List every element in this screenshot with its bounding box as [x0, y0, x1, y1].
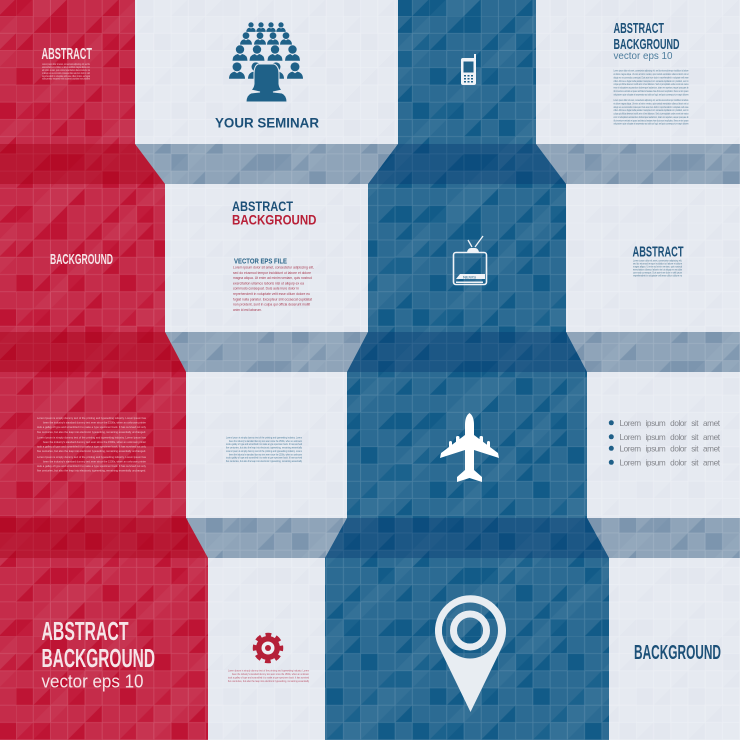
- tiny text block: sed do eiusmod tempor incididunt ut labore et dolore: [633, 262, 682, 266]
- tiny text block: took a galley of type and scrambled it to make a type specimen book. It has survived: [226, 456, 302, 460]
- body text: Lorem ipsum dolor sit amet, consectetur adipiscing elit,: [233, 266, 314, 270]
- tiny text block: voluptatem quia voluptas sit aspernatur aut odit aut fugit, sed quia consequuntur magni dolores: [614, 122, 689, 126]
- body text: non proident, sunt in culpa qui officia deserunt mollit: [233, 303, 310, 307]
- tiny text block on red: took a galley of type and scrambled it to make a type specimen book. It has survived not only: [37, 445, 147, 449]
- heading block: abstract background on red: BACKGROUND: [42, 643, 155, 673]
- heading: abstract: ABSTRACT: [232, 199, 294, 214]
- tiny text block: been the industry's standard dummy text ever since the 1500s, when an unknown: [229, 439, 302, 443]
- subheading: vector eps 10: vector eps 10: [614, 50, 673, 62]
- body text: exercitation ullamco laboris nisi ut aliquip ex ea: [233, 281, 305, 285]
- tiny text block on red: been the industry's standard dummy text ever since the 1500s, when an unknown printer: [43, 421, 146, 425]
- tiny text block on red: Lorem Ipsum is simply dummy text of the printing and typesetting industry. Lorem Ipsum has: [37, 455, 147, 459]
- panel: abstract right middle: [566, 184, 740, 332]
- tiny text block on red: been the industry's standard dummy text ever since the 1500s, when an unknown printer: [43, 459, 146, 463]
- tiny text block: culpa qui officia deserunt mollit anim id est laborum. Sed ut perspiciatis unde omnis iste natus: [614, 82, 689, 86]
- tiny text block: reprehenderit in voluptate velit esse cillum dolore eu: [633, 274, 682, 278]
- tiny text block: cillum dolore eu fugiat nulla pariatur. Excepteur sint occaecat cupidatat non proident, sunt in: [614, 108, 689, 112]
- heading block: abstract background on red: vector eps 10: [42, 670, 144, 692]
- tiny text block: been the industry's standard dummy text ever since the 1500s, when an unknown: [229, 452, 302, 456]
- tiny text block: error sit voluptatem accusantium doloremque laudantium, totam rem aperiam, eaque ipsa quae ab: [614, 115, 689, 119]
- panel: your seminar: [135, 0, 398, 144]
- icon: television: NEWS: [463, 274, 476, 279]
- heading: abstract: ABSTRACT: [632, 244, 684, 260]
- tiny text block: ad minim veniam, quis nostrud exercitation ullamco laboris nisi: [42, 68, 90, 72]
- tiny text block: et dolore magna aliqua. Ut enim ad minim veniam, quis nostrud exercitation ullamco laboris nisi ut: [614, 72, 689, 76]
- heading: your seminar: YOUR SEMINAR: [215, 114, 319, 130]
- heading: abstract background: ABSTRACT: [614, 20, 664, 37]
- heading: background: BACKGROUND: [232, 212, 317, 228]
- panel: center tiny text: [186, 372, 347, 518]
- tiny text block on red: Lorem Ipsum is simply dummy text of the printing and typesetting industry. Lorem Ipsum has: [37, 416, 147, 420]
- label: background on red: BACKGROUND: [50, 251, 113, 268]
- red column: [0, 0, 208, 740]
- bullet: item 2: Lorem ipsum dolor sit amet: [620, 433, 721, 442]
- body text: commodo consequat. Duis aute irure dolor in: [233, 287, 299, 291]
- blue column: [325, 0, 609, 740]
- tiny text block: [228, 668, 310, 683]
- tiny text block: five centuries, but also the leap into electronic typesetting, remaining essentially: [226, 459, 303, 463]
- tiny text block on red: five centuries, but also the leap into electronic typesetting, remaining essentially unchanged.: [37, 469, 146, 473]
- bullet: item 1: Lorem ipsum dolor sit amet: [620, 419, 721, 428]
- body text: [233, 266, 314, 312]
- panel: gear note: [208, 558, 325, 740]
- heading: abstract background: [614, 20, 680, 53]
- tiny text block on red: Lorem Ipsum is simply dummy text of the printing and typesetting industry. Lorem Ipsum has: [37, 435, 147, 439]
- heading block: abstract background on red: ABSTRACT: [42, 616, 129, 646]
- tiny text block: Lorem ipsum dolor sit amet, consectetur adipiscing elit, sed do eiusmod tempor incididunt ut labore: [614, 68, 689, 72]
- tiny text block on red: took a galley of type and scrambled it to make a type specimen book. It has survived not only: [37, 425, 147, 429]
- heading block: abstract background on red: [42, 616, 155, 692]
- body text: anim id est laborum.: [233, 308, 262, 312]
- body text: magna aliqua. Ut enim ad minim veniam, quis nostrud: [233, 276, 312, 280]
- tiny text block on red: been the industry's standard dummy text ever since the 1500s, when an unknown printer: [43, 440, 146, 444]
- tiny text block on red: five centuries, but also the leap into electronic typesetting, remaining essentially unchanged.: [37, 449, 146, 453]
- tiny text block: magna aliqua. Ut enim ad minim veniam, quis nostrud: [633, 264, 682, 268]
- tiny text block: commodo consequat. Duis aute irure dolor in velit ipsum: [633, 270, 683, 274]
- tiny text block: [633, 258, 683, 278]
- tiny text block: eiusmod tempor incididunt ut labore et dolore magna aliqua enim: [42, 65, 90, 69]
- tiny text block: Lorem ipsum dolor sit amet, consectetur adipiscing elit, sed do: [42, 62, 90, 66]
- tiny text block: illo inventore veritatis et quasi architecto beatae vitae dicta sunt explicabo. Nemo enim ipsam: [614, 118, 689, 122]
- tiny text block: Lorem ipsum dolor sit amet, consectetur adipiscing elit,: [633, 258, 682, 262]
- tiny text block: voluptatem quia voluptas sit aspernatur aut odit aut fugit, sed quia consequuntur magni dolores: [614, 92, 689, 96]
- tiny text block: error sit voluptatem accusantium doloremque laudantium, totam rem aperiam, eaque ipsa quae ab: [614, 86, 689, 90]
- tiny text block: [226, 436, 303, 463]
- tiny text block: ut aliquip ex ea commodo consequat duis aute irure dolor in velit: [42, 71, 90, 75]
- bullet: item 4: Lorem ipsum dolor sit amet: [620, 458, 721, 468]
- panel: right top text: [536, 0, 740, 144]
- panel: abstract background article: [165, 184, 368, 332]
- tiny text block: illo inventore veritatis et quasi architecto beatae vitae dicta sunt explicabo. Nemo enim ipsam: [614, 89, 689, 93]
- tiny text block: culpa qui officia deserunt mollit anim id est laborum. Sed ut perspiciatis unde omnis iste natus: [614, 112, 689, 116]
- subheading: vector eps file: VECTOR EPS FILE: [234, 256, 287, 266]
- tiny text block: Lorem Ipsum is simply dummy text of the printing and typesetting industry. Lorem: [226, 436, 303, 440]
- tiny text block: nulla pariatur excepteur sint occaecat cupidatat non proident: [42, 76, 90, 80]
- icon: map pin: [435, 595, 506, 712]
- tiny text block on red: took a galley of type and scrambled it to make a type specimen book. It has survived not only: [37, 464, 147, 468]
- tiny text block: [614, 68, 689, 126]
- panel: bullet list: [587, 372, 740, 518]
- icon: airplane: [440, 413, 499, 482]
- body text: fugiat nulla pariatur. Excepteur sint occaecat cupidatat: [233, 297, 312, 301]
- tiny text block: five centuries, but also the leap into electronic typesetting, remaining essentially: [228, 679, 310, 683]
- body text: sed do eiusmod tempor incididunt ut labore et dolore: [233, 271, 311, 275]
- heading: abstract: ABSTRACT: [42, 46, 92, 63]
- tiny text block: et dolore magna aliqua. Ut enim ad minim veniam, quis nostrud exercitation ullamco laboris nisi ut: [614, 101, 689, 105]
- horizontal gray bands: [0, 144, 740, 558]
- heading: abstract background: BACKGROUND: [614, 36, 680, 53]
- tiny text block: aliquip ex ea commodo consequat. Duis aute irure dolor in reprehenderit in voluptate velit esse: [614, 105, 689, 109]
- tiny text block: exercitation ullamco laboris nisi ut aliquip ex ea duis: [633, 268, 683, 272]
- tiny text block: five centuries, but also the leap into electronic typesetting, remaining essentially: [226, 445, 303, 449]
- tiny text block: aliquip ex ea commodo consequat. Duis aute irure dolor in reprehenderit in voluptate velit esse: [614, 75, 689, 79]
- panel: red top label: [42, 46, 92, 80]
- icon: mobile phone: [461, 54, 476, 85]
- panel: background label: [609, 558, 740, 740]
- tiny text block: Lorem ipsum dolor sit amet, consectetur adipiscing elit, sed do eiusmod tempor incididunt ut labore: [614, 98, 689, 102]
- bullet: item 3: Lorem ipsum dolor sit amet: [620, 444, 721, 454]
- icon: gear: [255, 635, 281, 661]
- tiny text block: reprehenderit in voluptate velit esse cillum dolore eu fugiat: [42, 74, 90, 78]
- tiny text block on red: five centuries, but also the leap into electronic typesetting, remaining essentially unchanged.: [37, 430, 146, 434]
- tiny text block: Lorem Ipsum is simply dummy text of the printing and typesetting industry. Lorem: [228, 668, 310, 672]
- tiny text block: been the industry's standard dummy text ever since the 1500s, when an unknown: [232, 672, 309, 676]
- tiny text block: cillum dolore eu fugiat nulla pariatur. Excepteur sint occaecat cupidatat non proident, sunt in: [614, 79, 689, 83]
- tiny text block: Lorem Ipsum is simply dummy text of the printing and typesetting industry. Lorem: [226, 449, 303, 453]
- icon: television: [454, 236, 486, 284]
- tiny text block: took a galley of type and scrambled it to make a type specimen book. It has survived: [228, 676, 309, 680]
- tiny text block: took a galley of type and scrambled it to make a type specimen book. It has survived: [226, 442, 302, 446]
- body text: reprehenderit in voluptate velit esse cillum dolore eu: [233, 292, 310, 296]
- tiny text block on red: [37, 416, 147, 473]
- tiny text block: [42, 62, 90, 80]
- icon: seminar audience: [229, 22, 303, 102]
